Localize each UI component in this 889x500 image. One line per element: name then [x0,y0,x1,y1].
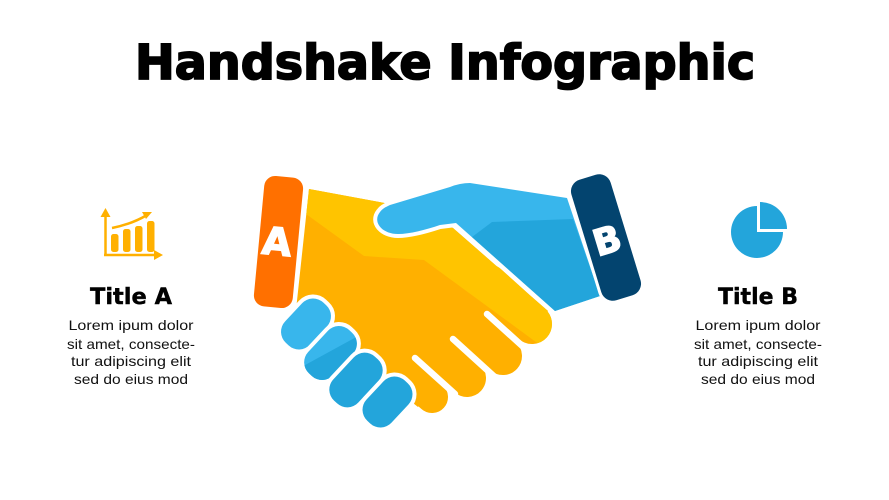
text block: title A body: sit amet, consecte- [67,336,195,352]
band B: B [588,218,627,265]
handshake illustration [253,171,644,434]
heading: title A: Title A [90,285,172,310]
left hand: yellow palm and fingers [296,189,552,413]
text block: title B body: tur adipiscing elit [698,353,818,369]
panel: title B [694,202,822,387]
finger 3 [323,346,389,414]
band B [568,171,644,304]
finger 1 [275,292,337,356]
band A [253,175,304,309]
band A: A [260,219,294,265]
right hand: blue palm and thumb [377,183,600,311]
blue fingers [281,294,416,428]
icon: pie chart [731,202,787,258]
text block: title B body [694,317,822,387]
icon: bar chart [100,208,163,260]
heading: title B: Title B [718,285,798,310]
title: Handshake Infographic [135,35,755,91]
text block: title A body: Lorem ipum dolor [68,317,194,333]
finger 4 [356,370,419,434]
text block: title B body: Lorem ipum dolor [696,317,821,333]
text block: title A body: sed do eius mod [74,371,188,387]
panel: title A [67,208,195,387]
text block: title A body: tur adipiscing elit [71,353,191,369]
text block: title A body [67,317,195,387]
finger 2 [304,322,361,380]
text block: title B body: sed do eius mod [701,371,815,387]
text block: title B body: sit amet, consecte- [694,336,822,352]
